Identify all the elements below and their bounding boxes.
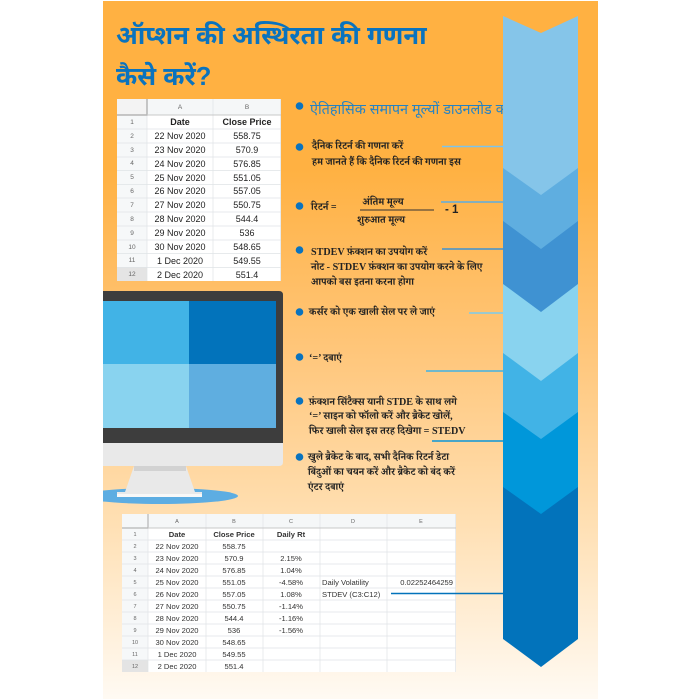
spreadsheet: closing prices — [117, 99, 281, 281]
spreadsheet: closing prices: 536 — [239, 228, 255, 238]
connector lines — [391, 146, 503, 594]
spreadsheet: daily returns and volatility: 0.02252464259 — [400, 578, 453, 587]
step 4: STDEV function — [296, 246, 484, 288]
spreadsheet: closing prices: 558.75 — [233, 131, 261, 141]
step 8: select data points: खुले ब्रैकेट के बाद, सभी दैनिक रिटर्न डेटा — [307, 451, 450, 463]
spreadsheet: closing prices: 26 Nov 2020 — [154, 186, 206, 196]
title — [116, 21, 427, 91]
spreadsheet: closing prices: 5 — [130, 174, 134, 181]
spreadsheet: closing prices: 8 — [130, 216, 134, 223]
step 6: press equals — [296, 352, 343, 364]
step 1: download closing prices: ऐतिहासिक समापन मूल्यों डाउनलोड करें — [310, 100, 514, 119]
spreadsheet: closing prices: 548.65 — [233, 242, 261, 252]
spreadsheet: daily returns and volatility: D — [351, 519, 355, 525]
step 3: return formula: - 1 — [445, 204, 459, 216]
spreadsheet: daily returns and volatility: 1.08% — [280, 590, 302, 599]
spreadsheet: daily returns and volatility: -1.56% — [279, 626, 303, 635]
step 3: return formula — [296, 196, 459, 226]
spreadsheet: daily returns and volatility: 536 — [228, 626, 240, 635]
spreadsheet: daily returns and volatility: 22 Nov 2020 — [155, 542, 199, 551]
spreadsheet: daily returns and volatility: 28 Nov 2020 — [155, 614, 199, 623]
step 3: return formula: रिटर्न = — [310, 201, 337, 213]
step 8: select data points — [296, 451, 456, 493]
step 2: daily return: दैनिक रिटर्न की गणना करें — [311, 139, 404, 152]
spreadsheet: daily returns and volatility: 8 — [133, 616, 137, 622]
spreadsheet: closing prices: 1 — [130, 119, 134, 126]
step 8: select data points: बिंदुओं का चयन करें और ब्रैकेट को बंद करें — [307, 465, 456, 478]
spreadsheet: daily returns and volatility: 12 — [132, 664, 138, 670]
spreadsheet: daily returns and volatility: 548.65 — [222, 638, 246, 647]
spreadsheet: daily returns and volatility: B — [232, 519, 236, 525]
spreadsheet: daily returns and volatility: 558.75 — [222, 542, 246, 551]
spreadsheet: daily returns and volatility: 550.75 — [222, 602, 246, 611]
spreadsheet: closing prices: 4 — [130, 160, 134, 167]
step 8: select data points: एंटर दबाएं — [307, 481, 345, 493]
spreadsheet: daily returns and volatility: -4.58% — [279, 578, 303, 587]
spreadsheet: closing prices: 23 Nov 2020 — [154, 145, 206, 155]
spreadsheet: closing prices: 557.05 — [233, 186, 261, 196]
spreadsheet: closing prices: 1 Dec 2020 — [157, 256, 203, 266]
spreadsheet: daily returns and volatility: 570.9 — [224, 554, 244, 563]
spreadsheet: daily returns and volatility: 2 — [133, 544, 137, 550]
spreadsheet: daily returns and volatility — [122, 514, 456, 672]
step 4: STDEV function: STDEV फ़ंक्शन का उपयोग करें — [311, 246, 428, 258]
title: ऑप्शन की अस्थिरता की गणना — [116, 21, 427, 50]
spreadsheet: closing prices: 24 Nov 2020 — [154, 159, 206, 169]
step 7: function syntax — [296, 395, 466, 437]
step 5: move cursor: कर्सर को एक खाली सेल पर ले जाएं — [308, 306, 436, 318]
spreadsheet: closing prices: 551.4 — [236, 270, 258, 280]
spreadsheet: closing prices: Close Price — [222, 117, 272, 127]
spreadsheet: closing prices: 28 Nov 2020 — [154, 214, 206, 224]
spreadsheet: daily returns and volatility: A — [175, 519, 179, 525]
icon: desktop monitor — [103, 291, 283, 504]
spreadsheet: closing prices: 7 — [130, 202, 134, 209]
spreadsheet: closing prices: 570.9 — [236, 145, 258, 155]
spreadsheet: daily returns and volatility: 24 Nov 2020 — [155, 566, 199, 575]
panel: orange background — [103, 1, 598, 699]
spreadsheet: closing prices: 3 — [130, 147, 134, 154]
spreadsheet: daily returns and volatility: 549.55 — [222, 650, 246, 659]
spreadsheet: daily returns and volatility: 544.4 — [224, 614, 244, 623]
spreadsheet: daily returns and volatility: 551.4 — [224, 662, 244, 671]
step 7: function syntax: फिर खाली सेल इस तरह दिखेगा = STEDV — [308, 425, 466, 437]
spreadsheet: daily returns and volatility: 7 — [133, 604, 137, 610]
spreadsheet: closing prices: 549.55 — [233, 256, 261, 266]
spreadsheet: daily returns and volatility: C — [289, 519, 293, 525]
step 4: STDEV function: नोट - STDEV फ़ंक्शन का उपयोग करने के लिए — [310, 261, 484, 273]
spreadsheet: daily returns and volatility: 1.04% — [280, 566, 302, 575]
spreadsheet: closing prices: 27 Nov 2020 — [154, 200, 206, 210]
step 2: daily return: हम जानते हैं कि दैनिक रिटर्न की गणना इस — [311, 155, 462, 168]
spreadsheet: daily returns and volatility: 551.05 — [222, 578, 246, 587]
spreadsheet: daily returns and volatility: 27 Nov 2020 — [155, 602, 199, 611]
spreadsheet: daily returns and volatility: 29 Nov 2020 — [155, 626, 199, 635]
spreadsheet: closing prices: Date — [170, 117, 190, 127]
step 3: return formula: अंतिम मूल्य — [362, 196, 405, 208]
step 4: STDEV function: आपको बस इतना करना होगा — [311, 276, 415, 288]
spreadsheet: closing prices: 22 Nov 2020 — [154, 131, 206, 141]
spreadsheet: closing prices: 544.4 — [236, 214, 258, 224]
step 6: press equals: ‘=’ दबाएं — [309, 352, 343, 364]
spreadsheet: daily returns and volatility: 11 — [132, 652, 138, 658]
spreadsheet: closing prices: 2 Dec 2020 — [157, 270, 203, 280]
step 7: function syntax: फ़ंक्शन सिंटैक्स यानी STDE के साथ लगे — [308, 395, 458, 408]
spreadsheet: closing prices: 12 — [128, 271, 136, 278]
spreadsheet: closing prices: 11 — [129, 257, 136, 264]
spreadsheet: closing prices: 10 — [128, 244, 136, 251]
spreadsheet: daily returns and volatility: 26 Nov 2020 — [155, 590, 199, 599]
spreadsheet: daily returns and volatility: 6 — [133, 592, 137, 598]
spreadsheet: closing prices: A — [178, 104, 183, 111]
step 2: daily return — [296, 139, 462, 168]
spreadsheet: closing prices: 550.75 — [233, 200, 261, 210]
step 7: function syntax: ‘=’ साइन को फॉलो करें और ब्रैकेट खोलें, — [309, 410, 453, 422]
spreadsheet: closing prices: 30 Nov 2020 — [154, 242, 206, 252]
spreadsheet: daily returns and volatility: 10 — [132, 640, 138, 646]
spreadsheet: daily returns and volatility: Daily Volatility — [322, 578, 369, 587]
step 3: return formula: शुरुआत मूल्य — [357, 215, 406, 226]
spreadsheet: daily returns and volatility: 2.15% — [280, 554, 302, 563]
spreadsheet: daily returns and volatility: 557.05 — [222, 590, 246, 599]
spreadsheet: daily returns and volatility: 30 Nov 2020 — [155, 638, 199, 647]
spreadsheet: daily returns and volatility: Daily Rt — [277, 530, 306, 539]
spreadsheet: daily returns and volatility: 1 — [133, 532, 137, 538]
spreadsheet: daily returns and volatility: 1 Dec 2020 — [158, 650, 196, 659]
spreadsheet: daily returns and volatility: -1.16% — [279, 614, 303, 623]
spreadsheet: closing prices: 29 Nov 2020 — [154, 228, 206, 238]
spreadsheet: daily returns and volatility: 2 Dec 2020 — [158, 662, 196, 671]
spreadsheet: daily returns and volatility: 576.85 — [222, 566, 246, 575]
spreadsheet: closing prices: 551.05 — [233, 173, 261, 183]
spreadsheet: daily returns and volatility: 3 — [133, 556, 137, 562]
spreadsheet: daily returns and volatility: E — [419, 519, 423, 525]
spreadsheet: daily returns and volatility: Close Price — [213, 530, 255, 539]
spreadsheet: closing prices: 2 — [130, 133, 134, 140]
spreadsheet: closing prices: 6 — [130, 188, 134, 195]
spreadsheet: daily returns and volatility: 5 — [133, 580, 137, 586]
spreadsheet: closing prices: 25 Nov 2020 — [154, 173, 206, 183]
spreadsheet: daily returns and volatility: -1.14% — [279, 602, 303, 611]
spreadsheet: daily returns and volatility: 9 — [133, 628, 137, 634]
spreadsheet: daily returns and volatility: 4 — [133, 568, 137, 574]
spreadsheet: daily returns and volatility: STDEV (C3:C12) — [322, 590, 381, 599]
spreadsheet: closing prices: 576.85 — [233, 159, 261, 169]
spreadsheet: daily returns and volatility: Date — [169, 530, 185, 539]
title: कैसे करें? — [116, 62, 211, 91]
spreadsheet: closing prices: 9 — [130, 230, 134, 237]
spreadsheet: daily returns and volatility: 25 Nov 2020 — [155, 578, 199, 587]
spreadsheet: daily returns and volatility: 23 Nov 2020 — [155, 554, 199, 563]
spreadsheet: closing prices: B — [245, 104, 249, 111]
chevron ribbon — [503, 16, 578, 667]
